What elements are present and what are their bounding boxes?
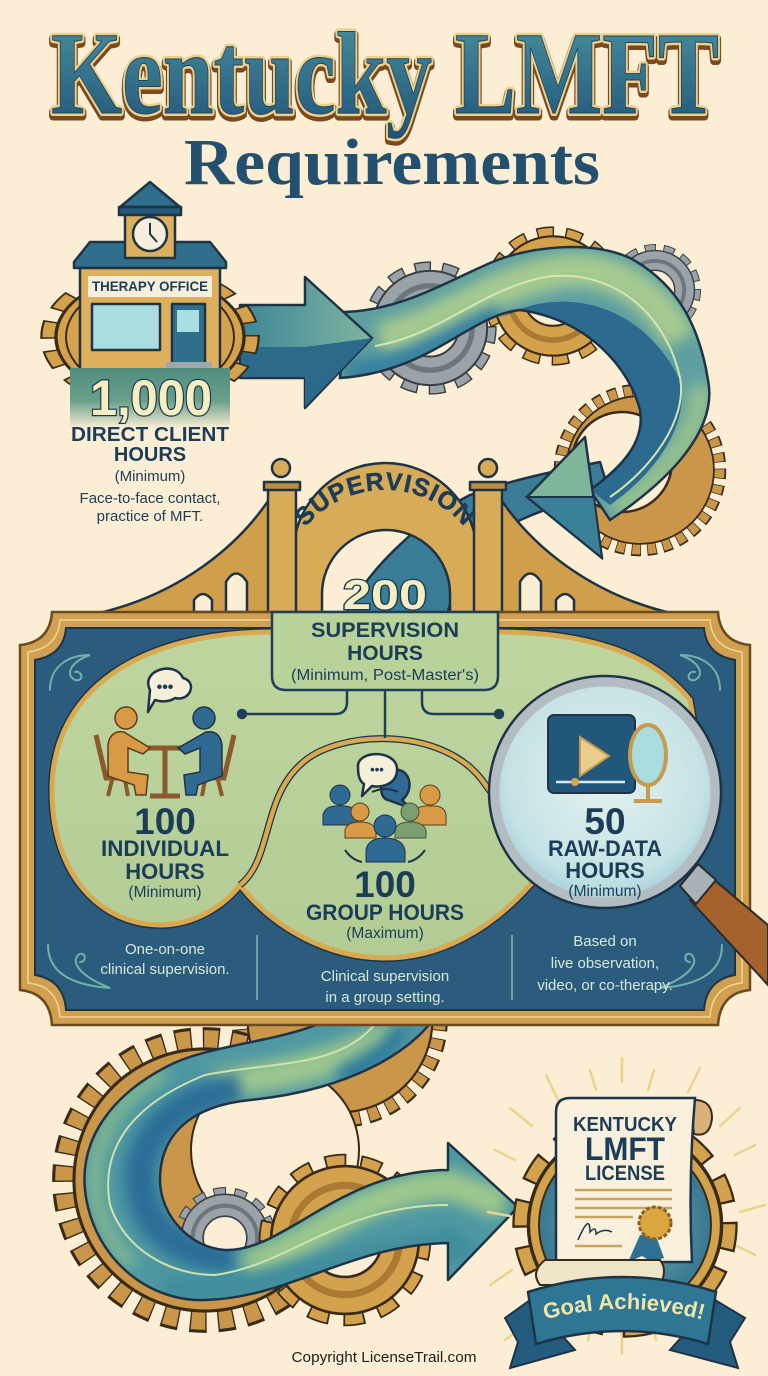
- bridge span left: [95, 495, 272, 614]
- bridge: supervision arch: [102, 458, 668, 611]
- icon: gear: [524, 1124, 726, 1326]
- scroll bottom: [536, 1260, 664, 1285]
- stat: 1,000 direct client hours: 1,000: [90, 370, 212, 426]
- descriptions: in a group setting.: [325, 989, 445, 1006]
- pillar left: [264, 459, 300, 614]
- descriptions: live observation,: [551, 955, 659, 972]
- lens: [489, 676, 721, 908]
- ornaments: [48, 655, 722, 988]
- subtitle: Requirements: [184, 126, 600, 199]
- stat: 50 raw-data hours: HOURS: [565, 858, 645, 883]
- icon: video player: [548, 715, 635, 793]
- icon: door: [166, 304, 212, 370]
- stat: 50 raw-data hours: [548, 801, 662, 900]
- banner: [504, 1276, 746, 1370]
- stat: 100 group hours: 100: [354, 864, 416, 905]
- arrowhead: [527, 437, 602, 558]
- icon: roof: [74, 242, 226, 268]
- handle: [680, 864, 768, 985]
- descriptions: Clinical supervision: [321, 968, 449, 985]
- descriptions: Based on: [573, 933, 637, 950]
- stat: 100 group hours: GROUP HOURS: [306, 900, 464, 925]
- stat: 1,000 direct client hours: [70, 368, 230, 525]
- scroll: LICENSE: [585, 1162, 665, 1185]
- arrow: ribbon to license: [84, 1005, 518, 1300]
- box: 200 supervision hours: (Minimum, Post-Master's): [291, 667, 479, 684]
- icon: clock tower: [119, 182, 181, 258]
- gears: lower path: [68, 923, 437, 1317]
- ribbon: upper sweep: [340, 247, 709, 520]
- icon: mirror: [630, 725, 666, 801]
- office: therapy building: [51, 182, 249, 400]
- rim: [495, 682, 715, 902]
- icon: facade: [80, 268, 220, 372]
- number: 200: 200: [343, 571, 427, 618]
- scroll: KENTUCKY: [573, 1114, 678, 1136]
- stat: 100 group hours: (Maximum): [346, 925, 424, 942]
- bridge span right: [498, 495, 675, 614]
- pillar right: [470, 459, 506, 614]
- banner: Goal Achieved!: [544, 1293, 704, 1320]
- gears: upper path: [370, 234, 717, 547]
- arrow: from office: [240, 277, 372, 408]
- stat: 1,000 direct client hours: practice of MFT.: [97, 508, 203, 525]
- stat: 100 individual hours: HOURS: [125, 859, 205, 884]
- stat: 50 raw-data hours: RAW-DATA: [548, 836, 662, 861]
- magnifying glass: raw-data hours: [489, 676, 768, 985]
- ribbon: passing through arch: [340, 462, 610, 625]
- stat: 1,000 direct client hours: Face-to-face contact,: [80, 490, 220, 507]
- panel: supervision frame: [20, 571, 750, 1025]
- stat: 100 individual hours: 100: [134, 801, 196, 842]
- icon: individual supervision: •••: [157, 679, 174, 696]
- icon: group supervision: •••: [370, 762, 384, 777]
- descriptions: clinical supervision.: [100, 961, 230, 978]
- copyright: Copyright LicenseTrail.com: [292, 1349, 476, 1366]
- arch label: SUPERVISION: [296, 472, 476, 526]
- connectors: [238, 690, 503, 738]
- stat: 50 raw-data hours: 50: [584, 801, 626, 842]
- descriptions: [100, 933, 673, 1006]
- sign: therapy office: THERAPY OFFICE: [92, 278, 208, 294]
- icon: window: [92, 304, 160, 350]
- icon: group supervision: [323, 754, 446, 862]
- certificate: Kentucky LMFT license: [486, 1056, 766, 1370]
- stat: 1,000 direct client hours: (Minimum): [115, 468, 185, 485]
- descriptions: One-on-one: [125, 941, 205, 958]
- green shape: supervision categories: [52, 632, 700, 958]
- stat: 1,000 direct client hours: DIRECT CLIENT: [71, 424, 229, 446]
- icon: individual supervision: [96, 669, 234, 796]
- sun rays: [488, 1058, 765, 1353]
- arch band: [293, 463, 477, 614]
- icon: gear behind office: [51, 274, 249, 400]
- stat: 50 raw-data hours: (Minimum): [568, 883, 642, 900]
- stat: 100 individual hours: INDIVIDUAL: [101, 836, 229, 861]
- stat: 100 group hours: [306, 864, 464, 942]
- stat: 100 individual hours: [101, 801, 229, 901]
- box: 200 supervision hours: [272, 612, 498, 690]
- stat: 1,000 direct client hours: HOURS: [114, 444, 186, 466]
- stat: 100 individual hours: (Minimum): [128, 884, 202, 901]
- arrow: ribbon into supervision: [340, 247, 709, 625]
- scroll: LMFT: [585, 1131, 665, 1167]
- scroll: [556, 1098, 712, 1262]
- descriptions: video, or co-therapy.: [537, 977, 673, 994]
- box: 200 supervision hours: HOURS: [347, 642, 423, 665]
- box: 200 supervision hours: SUPERVISION: [311, 619, 459, 642]
